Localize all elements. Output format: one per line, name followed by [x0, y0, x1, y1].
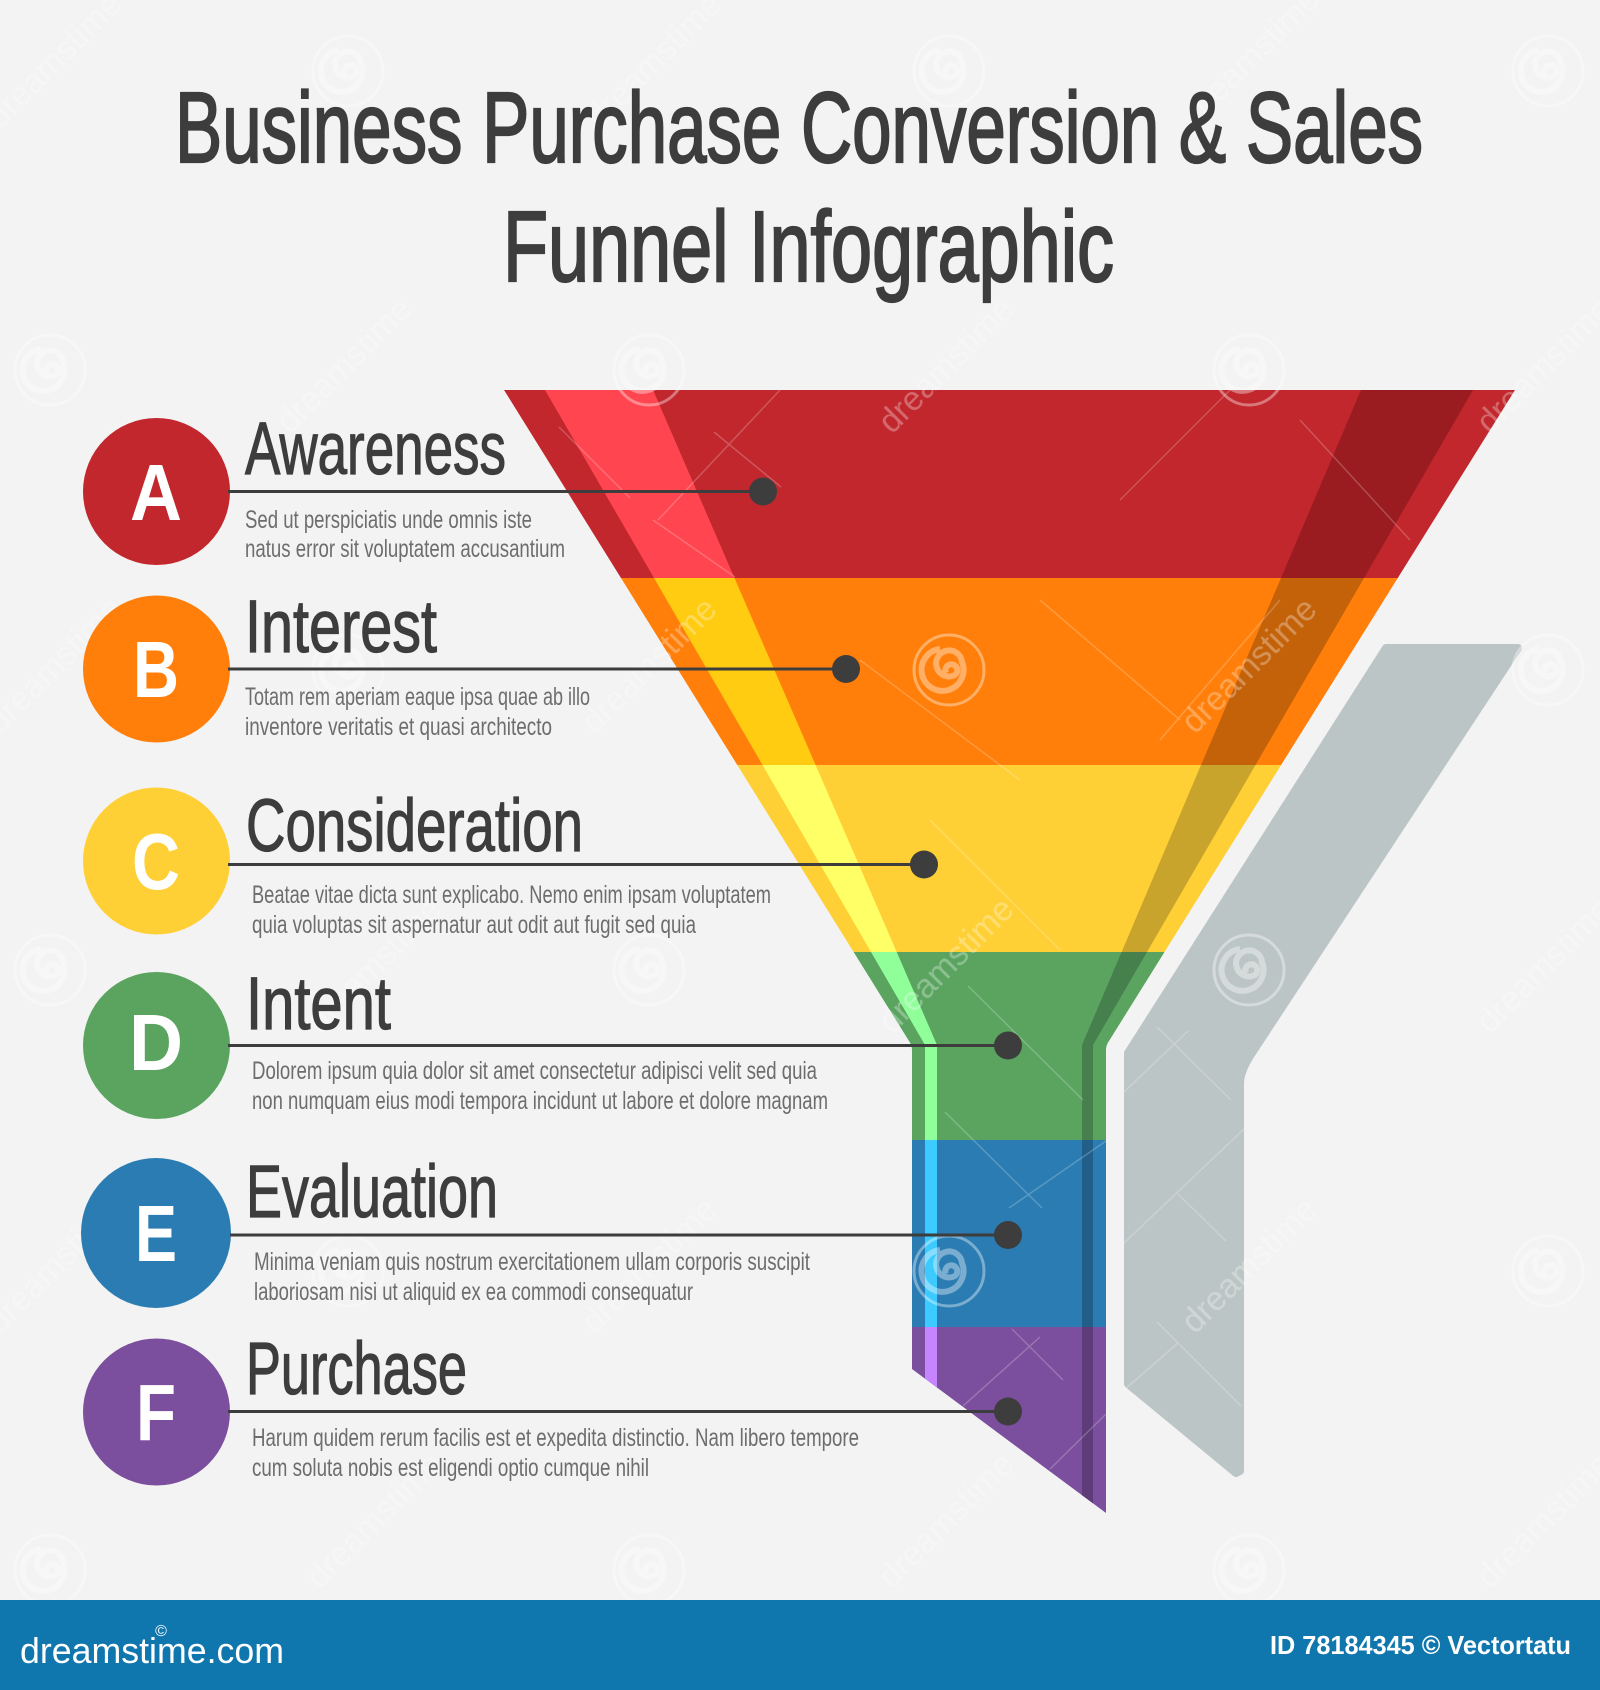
- description E: Minima veniam quis nostrum exercitationem ullam corporis suscipit: [254, 1248, 810, 1276]
- watermark wordmarks: dreamstime: [871, 890, 1021, 1041]
- description D: [252, 1057, 828, 1115]
- badge C: C: [132, 817, 180, 906]
- description F: cum soluta nobis est eligendi optio cumque nihil: [252, 1454, 649, 1482]
- badge D: D: [129, 998, 183, 1087]
- stage A: awareness: [83, 407, 777, 565]
- connector F: [228, 1398, 1022, 1426]
- connector D: [228, 1032, 1022, 1060]
- badge A: A: [130, 448, 182, 537]
- stage C: consideration: [83, 784, 938, 939]
- description B: inventore veritatis et quasi architecto: [245, 713, 552, 741]
- connector E: [230, 1221, 1022, 1249]
- watermark wordmarks: dreamstime: [1174, 1190, 1324, 1341]
- watermark wordmarks: dreamstime: [574, 590, 724, 741]
- description E: laboriosam nisi ut aliquid ex ea commodi consequatur: [254, 1278, 693, 1306]
- description F: Harum quidem rerum facilis est et expedita distinctio. Nam libero tempore: [252, 1424, 859, 1452]
- footer credit: ID 78184345 © Vectortatu: [1270, 1630, 1571, 1660]
- badge A: [83, 418, 230, 565]
- description C: quia voluptas sit aspernatur aut odit aut fugit sed quia: [252, 911, 696, 939]
- heading awareness: Awareness: [245, 407, 506, 490]
- heading purchase: Purchase: [246, 1327, 467, 1410]
- badge F: [83, 1338, 230, 1486]
- description C: Beatae vitae dicta sunt explicabo. Nemo enim ipsam voluptatem: [252, 881, 771, 909]
- stage E: evaluation: [81, 1150, 1022, 1308]
- badge F: F: [136, 1368, 176, 1457]
- watermark wordmarks: dreamstime: [1174, 590, 1324, 741]
- description D: non numquam eius modi tempora incidunt ut labore et dolore magnam: [252, 1087, 828, 1115]
- badge B: [83, 596, 230, 742]
- funnel band: intent green: [854, 952, 1164, 1140]
- connector A: [228, 478, 777, 506]
- description B: Totam rem aperiam eaque ipsa quae ab illo: [245, 683, 590, 711]
- badge D: [83, 972, 230, 1119]
- watermark wordmarks: dreamstime: [871, 290, 1021, 441]
- stage D: intent: [83, 962, 1022, 1119]
- title: [175, 72, 1423, 303]
- footer bar: [0, 1600, 1600, 1690]
- footer logo: ©: [155, 1623, 167, 1640]
- heading consideration: Consideration: [246, 784, 583, 867]
- badge C: [83, 788, 230, 934]
- stage F: purchase: [83, 1327, 1022, 1486]
- badge B: B: [133, 625, 179, 714]
- funnel band: consideration yellow: [737, 765, 1282, 952]
- watermark wordmarks: dreamstime: [269, 290, 419, 441]
- funnel shadow: [1128, 648, 1518, 1473]
- connector B: [228, 655, 860, 683]
- funnel: [480, 390, 1540, 1517]
- watermark wordmarks: dreamstime: [871, 1445, 1021, 1596]
- stage B: interest: [83, 585, 860, 742]
- description A: Sed ut perspiciatis unde omnis iste: [245, 506, 532, 534]
- description A: [245, 506, 565, 563]
- description D: Dolorem ipsum quia dolor sit amet consectetur adipisci velit sed quia: [252, 1057, 817, 1085]
- badge E: E: [135, 1189, 177, 1278]
- watermark wordmarks: dreamstime: [299, 1445, 449, 1596]
- watermark crossing lines: [110, 390, 1410, 1469]
- description F: [252, 1424, 859, 1482]
- watermark wordmarks: dreamstime: [299, 890, 449, 1041]
- funnel band: evaluation blue: [912, 1140, 1106, 1327]
- description A: natus error sit voluptatem accusantium: [245, 535, 565, 563]
- heading evaluation: Evaluation: [246, 1150, 498, 1233]
- footer logo: dreamstime.com: [20, 1630, 284, 1671]
- title: Funnel Infographic: [503, 191, 1114, 303]
- description E: [254, 1248, 810, 1306]
- badge E: [81, 1158, 231, 1308]
- funnel band: purchase purple: [912, 1327, 1106, 1513]
- connector C: [228, 850, 938, 878]
- watermark wordmarks: dreamstime: [574, 1190, 724, 1341]
- funnel band: interest orange: [621, 578, 1398, 765]
- funnel band: awareness red: [480, 390, 1540, 578]
- heading interest: Interest: [245, 585, 437, 668]
- description C: [252, 881, 771, 939]
- heading intent: Intent: [246, 962, 391, 1045]
- description B: [245, 683, 590, 741]
